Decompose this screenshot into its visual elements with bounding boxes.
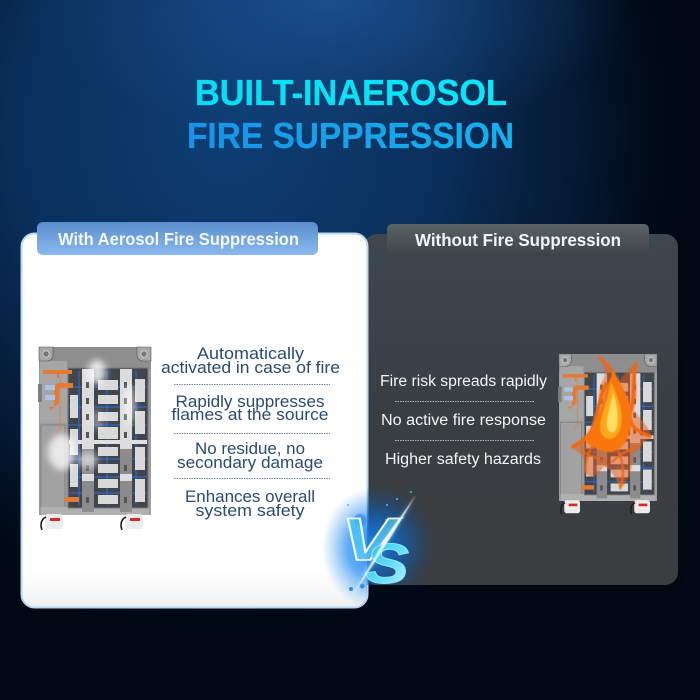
glow on dark panel <box>367 487 432 585</box>
text: with suppression points: No residue, no <box>195 439 305 458</box>
text: without suppression points: No active fire response <box>381 412 546 429</box>
VS badge <box>324 487 432 604</box>
smoke <box>48 360 135 470</box>
text: with suppression points: system safety <box>196 501 305 520</box>
text: with suppression points <box>161 344 340 520</box>
text: with suppression points: Automatically <box>197 344 305 363</box>
cabinet on fire <box>558 354 657 514</box>
tab: without fire suppression: Without Fire Suppression <box>415 230 621 250</box>
text: without suppression points: Higher safety hazards <box>385 451 541 468</box>
VS badge: V <box>341 506 402 573</box>
tab: with aerosol fire suppression <box>37 222 318 255</box>
tab: with aerosol fire suppression: With Aerosol Fire Suppression <box>58 229 299 249</box>
panel: with aerosol fire suppression <box>22 222 368 608</box>
text: with suppression points: activated in case of fire <box>161 358 340 377</box>
title <box>187 72 514 156</box>
text: without suppression points: Fire risk spreads rapidly <box>380 373 547 390</box>
title: FIRE SUPPRESSION <box>187 115 514 156</box>
tab: without fire suppression <box>387 224 649 256</box>
title: BUILT-INAEROSOL <box>195 72 507 113</box>
icon: flames <box>573 358 652 490</box>
text: with suppression points: flames at the source <box>172 405 328 424</box>
text: with suppression points: Enhances overall <box>185 487 315 506</box>
glow on white panel <box>324 490 367 604</box>
text: with suppression points: Rapidly suppresses <box>176 392 324 411</box>
text: without suppression points <box>380 373 547 468</box>
text: with suppression points: secondary damage <box>177 453 323 472</box>
panel: without fire suppression <box>364 224 678 585</box>
VS badge: S <box>365 532 409 596</box>
cabinet with aerosol <box>38 347 151 530</box>
